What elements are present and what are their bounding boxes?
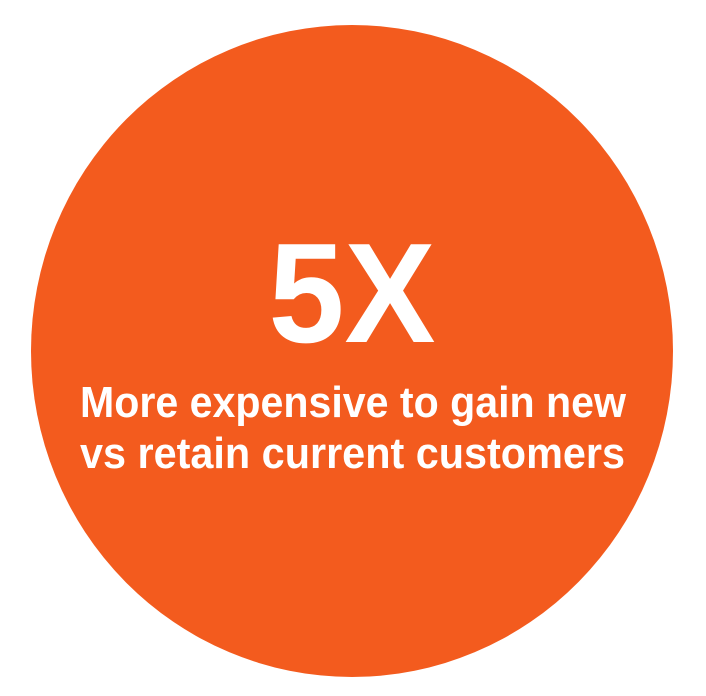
description text — [80, 378, 627, 478]
description text: More expensive to gain new — [80, 378, 627, 427]
big number: 5X: 5X — [268, 214, 436, 373]
description text: vs retain current customers — [80, 429, 625, 478]
